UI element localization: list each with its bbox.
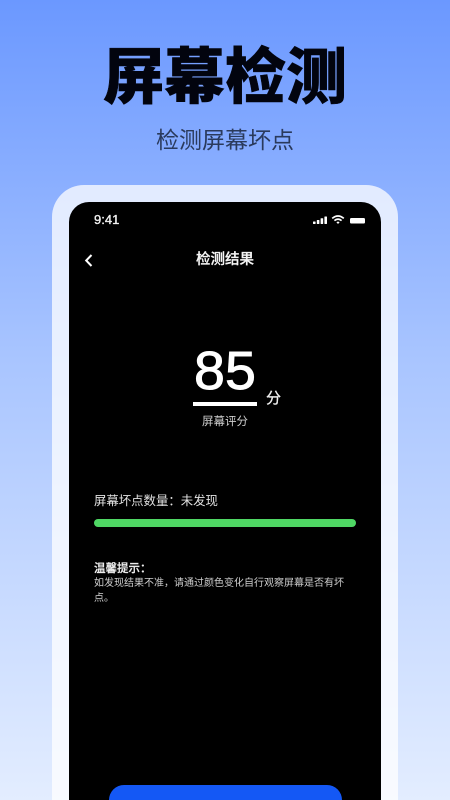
score label: 屏幕评分 — [202, 416, 248, 428]
screen title: 检测结果 — [196, 252, 254, 268]
status bar icons — [313, 215, 365, 224]
score underline — [193, 402, 257, 406]
phone frame — [52, 185, 398, 800]
tip heading: 温馨提示： — [94, 563, 152, 575]
score unit: 分 — [266, 390, 281, 407]
status bar time: 9:41 — [94, 212, 119, 227]
phone screen — [69, 202, 381, 800]
title: 屏幕检测 — [103, 43, 347, 111]
green progress bar — [94, 519, 356, 527]
score number: 85 — [194, 341, 256, 401]
dead pixel count label: 屏幕坏点数量：未发现 — [94, 494, 218, 508]
subtitle: 检测屏幕坏点 — [156, 127, 294, 153]
back arrow — [84, 254, 92, 267]
blue button — [109, 785, 342, 800]
tip body: 如发现结果不准，请通过颜色变化自行观察屏幕是否有坏点。 — [94, 578, 344, 604]
